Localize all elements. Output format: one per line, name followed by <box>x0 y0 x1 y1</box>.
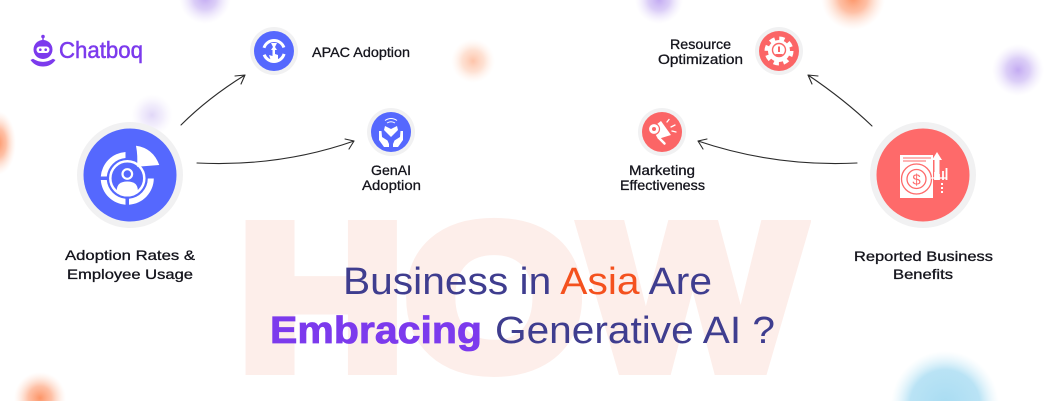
node: Marketing Effectiveness <box>620 108 705 193</box>
arrow: to APAC Adoption <box>181 75 245 125</box>
node: Reported Business Benefits: Benefits <box>893 266 953 282</box>
icon: business report: $ <box>912 172 921 188</box>
arrow: to Marketing Effectiveness <box>698 139 857 164</box>
node: Adoption Rates & Employee Usage: Employee Usage <box>67 266 193 282</box>
node: Adoption Rates & Employee Usage <box>65 122 196 282</box>
node: APAC Adoption <box>250 27 410 75</box>
icon: robot logo <box>30 35 56 66</box>
node: GenAI Adoption <box>362 108 421 193</box>
node: Marketing Effectiveness: Effectiveness <box>620 177 705 193</box>
title: Embracing <box>270 310 482 352</box>
node: Reported Business Benefits <box>854 122 993 282</box>
label: Resource <box>670 36 731 52</box>
label: Marketing <box>629 162 695 178</box>
label: Reported Business <box>854 248 993 264</box>
node: GenAI Adoption: Adoption <box>362 177 421 193</box>
label: GenAI <box>371 162 411 178</box>
icon: business report <box>870 122 976 228</box>
title <box>270 261 775 352</box>
arrow: to GenAI Adoption <box>197 139 354 164</box>
icon: hourglass touch <box>250 27 298 75</box>
arrow: to Resource Optimization <box>808 75 872 126</box>
label: Adoption Rates & <box>65 247 196 263</box>
icon: megaphone target <box>638 108 686 156</box>
title: Business in Asia Are <box>343 261 712 303</box>
icon: adoption rates circle <box>77 122 183 228</box>
node: Resource Optimization <box>658 27 803 75</box>
label: APAC Adoption <box>312 44 410 60</box>
icon: gear gauge <box>755 27 803 75</box>
node: Resource Optimization: Optimization <box>658 51 743 67</box>
logo: Chatboq <box>30 35 143 66</box>
logo wordmark: Chatboq <box>59 37 143 63</box>
icon: hands with wifi <box>367 108 415 156</box>
title: Generative AI ? <box>495 310 775 352</box>
